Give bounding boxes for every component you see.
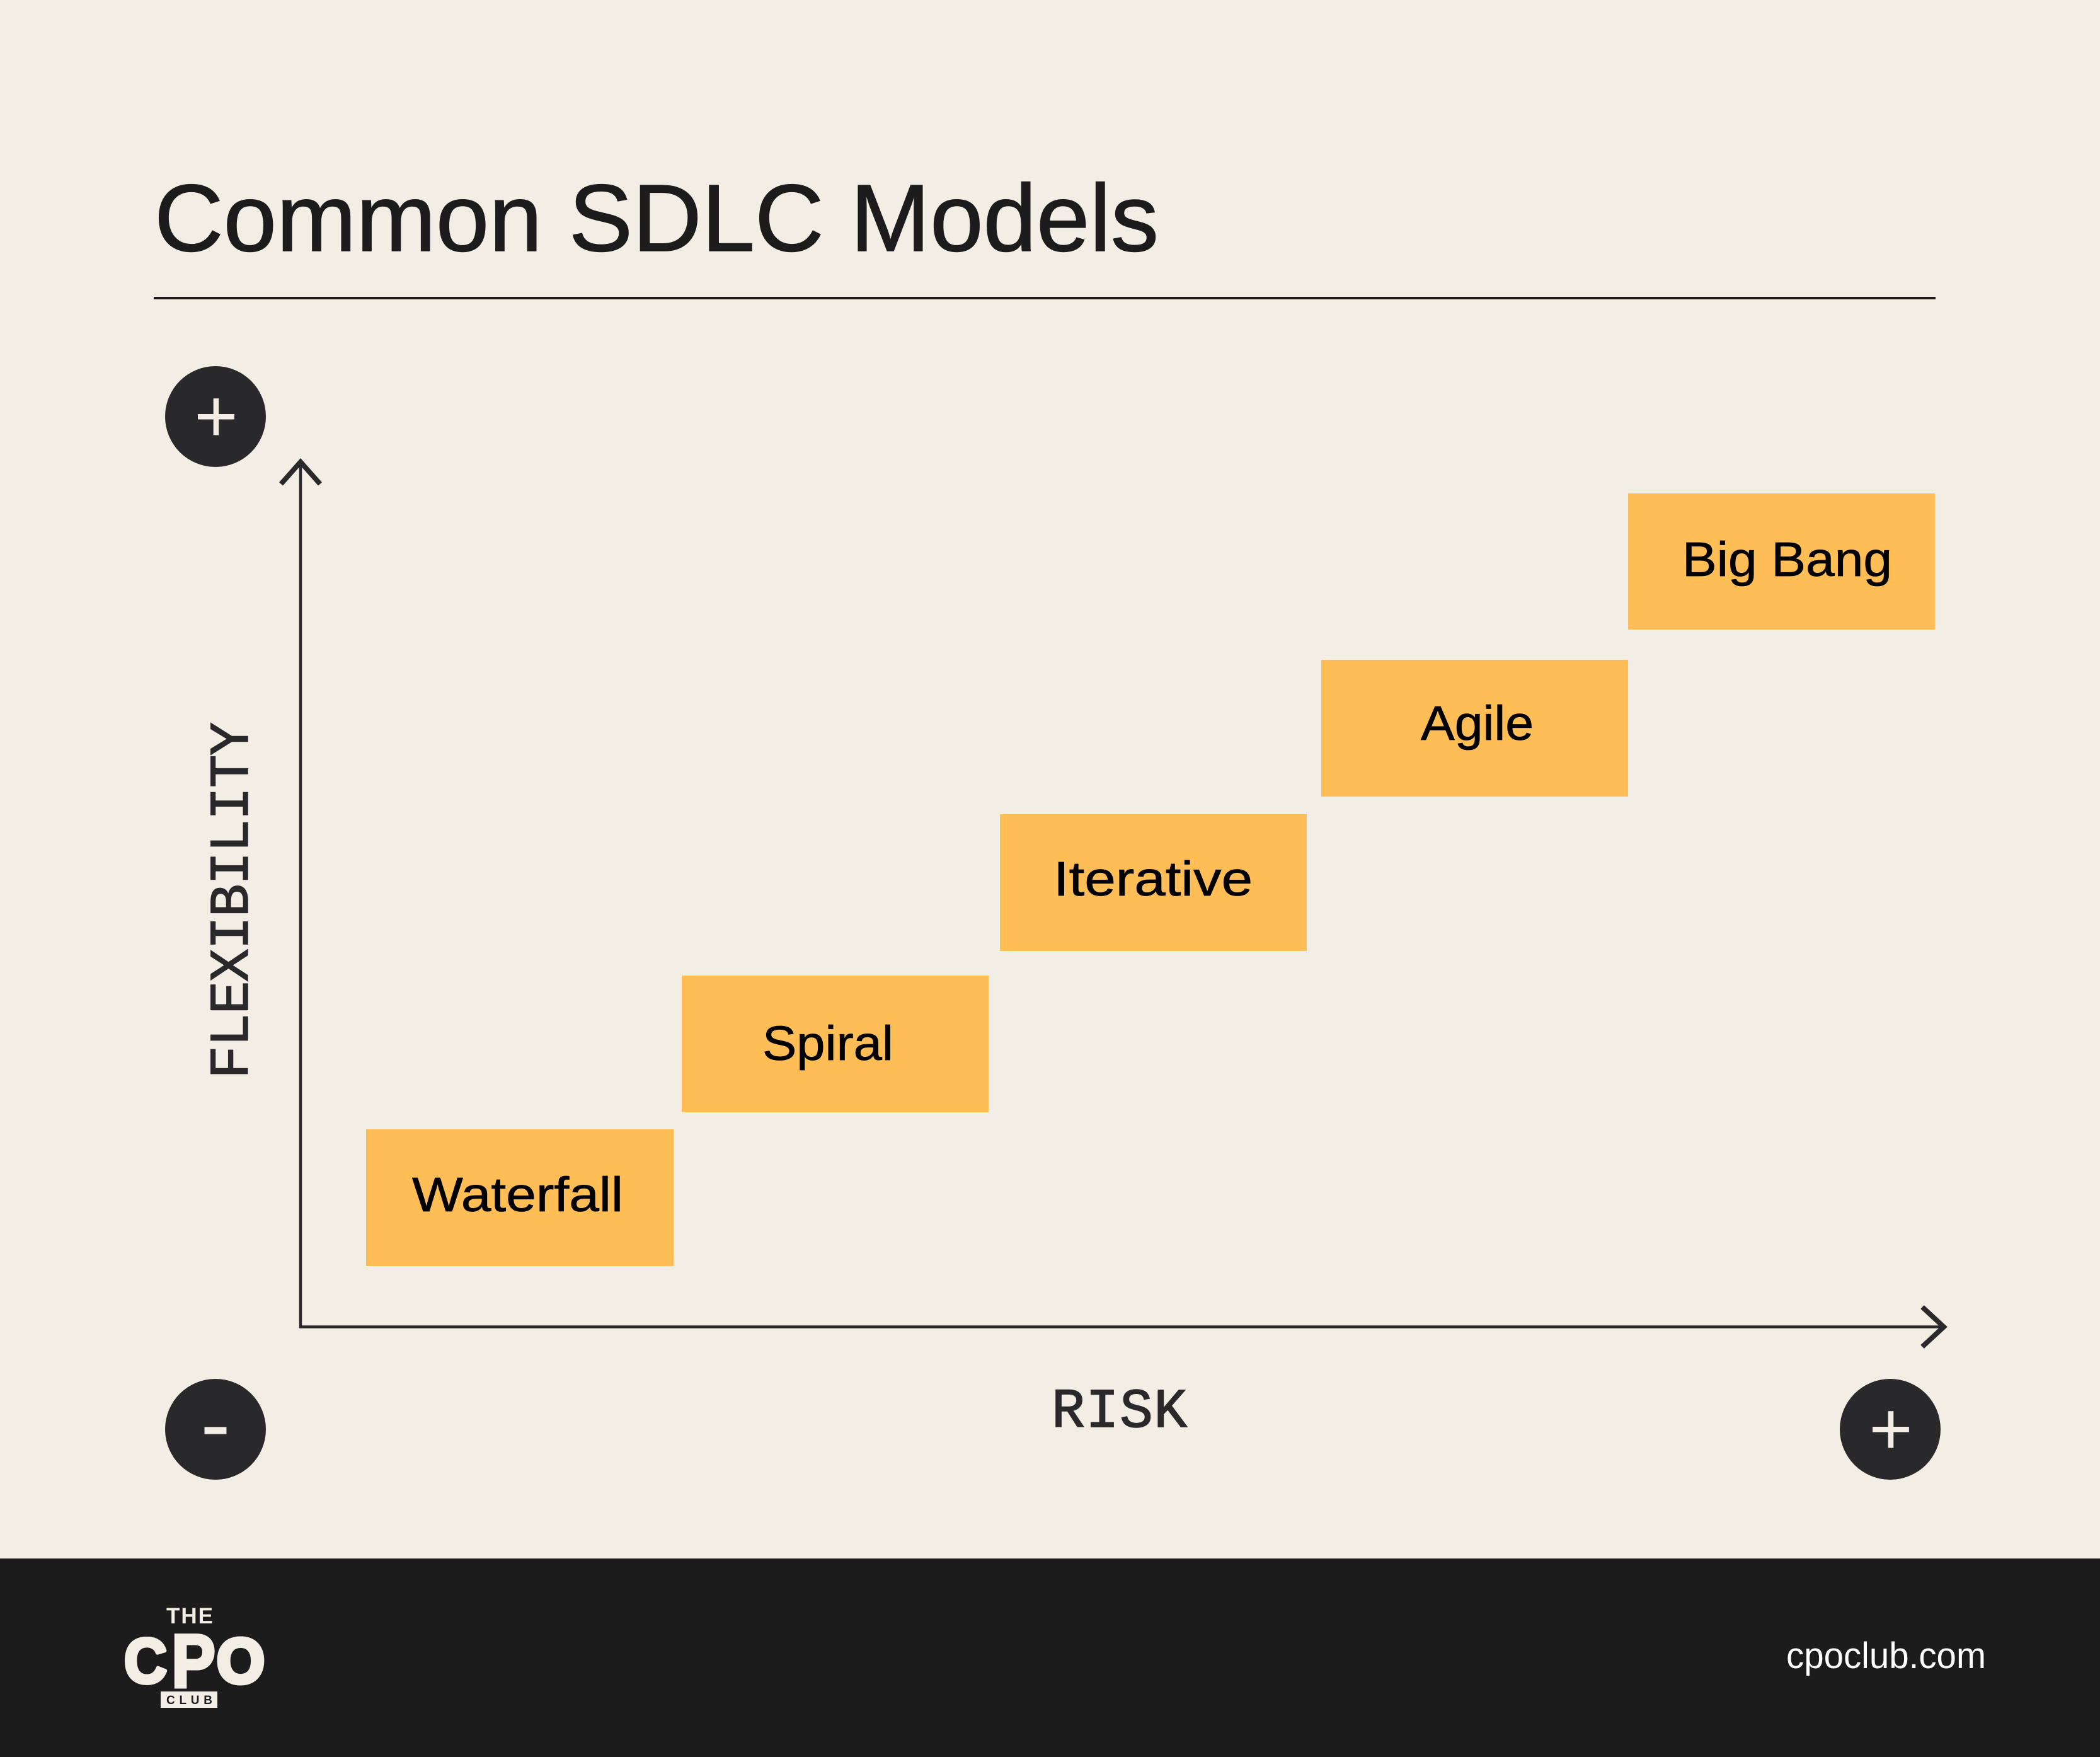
title: Common SDLC Models <box>154 164 1159 271</box>
model box: Agile: Agile <box>1421 696 1534 751</box>
x-axis arrow <box>299 1307 1944 1347</box>
y-axis top plus badge: + <box>194 374 238 458</box>
x-axis plus badge <box>1840 1379 1941 1480</box>
model box: Spiral <box>682 976 989 1112</box>
x-axis minus badge: - <box>200 1374 231 1474</box>
model box: Waterfall <box>366 1129 674 1266</box>
y-axis label: FLEXIBILITY <box>202 722 265 1079</box>
y-axis top plus badge <box>165 366 266 467</box>
model box: Waterfall: Waterfall <box>412 1168 623 1222</box>
footer bar <box>0 1558 2100 1757</box>
model box: Big Bang <box>1628 493 1935 630</box>
website url: cpoclub.com <box>1786 1635 1986 1676</box>
model box: Big Bang: Big Bang <box>1682 533 1892 587</box>
model box: Spiral: Spiral <box>762 1017 893 1071</box>
logo: The CPO Club: C <box>124 1626 167 1697</box>
logo: The CPO Club: P <box>171 1619 215 1703</box>
logo: The CPO Club: O <box>217 1626 265 1697</box>
model box: Iterative <box>1000 814 1307 951</box>
logo: The CPO Club: CLUB <box>166 1694 212 1707</box>
y-axis arrow <box>281 462 320 1327</box>
logo: The CPO Club <box>124 1604 265 1708</box>
logo: The CPO Club: THE <box>166 1604 213 1628</box>
model box: Iterative: Iterative <box>1053 852 1253 906</box>
x-axis minus badge <box>165 1374 266 1480</box>
x-axis label: RISK <box>1052 1381 1187 1444</box>
x-axis plus badge: + <box>1869 1387 1913 1471</box>
model box: Agile <box>1321 660 1628 797</box>
